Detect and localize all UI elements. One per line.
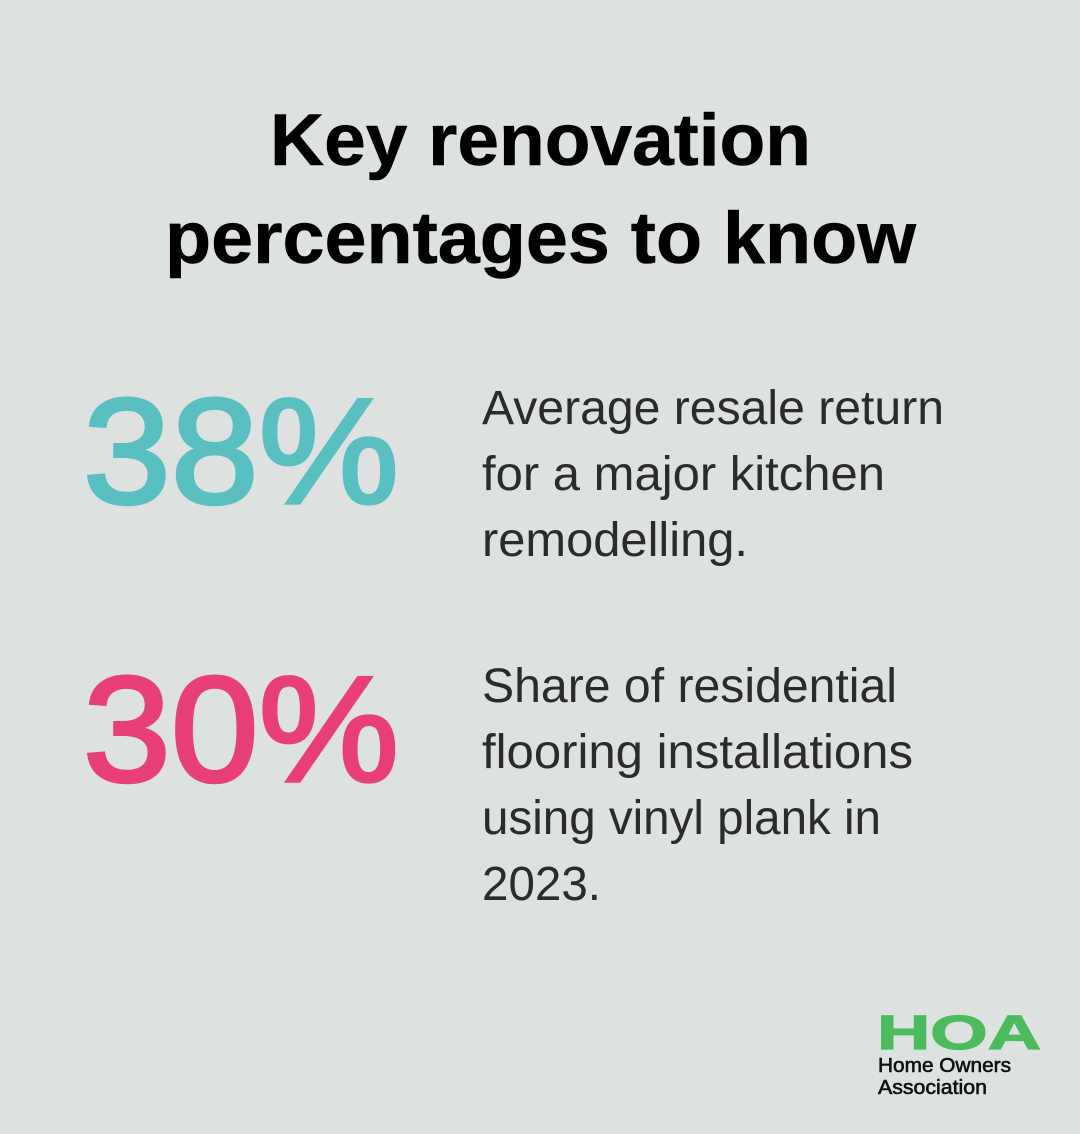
stat description: vinyl plank flooring: flooring installations bbox=[482, 726, 913, 779]
stat description: vinyl plank flooring: 2023. bbox=[482, 858, 601, 911]
title: percentages to know bbox=[165, 198, 916, 279]
stat description: vinyl plank flooring bbox=[482, 660, 913, 911]
logo wordmark: Association bbox=[878, 1077, 987, 1099]
stat description: kitchen remodelling: for a major kitchen bbox=[482, 448, 885, 501]
title bbox=[165, 100, 916, 279]
logo wordmark: Home Owners bbox=[878, 1055, 1011, 1077]
stat: 30% vinyl plank bbox=[83, 645, 913, 911]
stat description: kitchen remodelling bbox=[482, 382, 944, 567]
stat description: vinyl plank flooring: using vinyl plank in bbox=[482, 792, 881, 845]
stat number: 38%: 38% bbox=[83, 367, 399, 535]
stat: 38% resale return bbox=[83, 367, 944, 567]
stat description: kitchen remodelling: remodelling. bbox=[482, 514, 748, 567]
stat description: kitchen remodelling: Average resale return bbox=[482, 382, 944, 435]
logo wordmark bbox=[878, 1055, 1011, 1099]
logo mark: HOA: HOA bbox=[877, 1007, 1041, 1060]
title: Key renovation bbox=[270, 100, 811, 181]
stat description: vinyl plank flooring: Share of residential bbox=[482, 660, 897, 713]
logo: Home Owners Association bbox=[877, 1007, 1041, 1099]
stat number: 30%: 30% bbox=[83, 645, 399, 813]
